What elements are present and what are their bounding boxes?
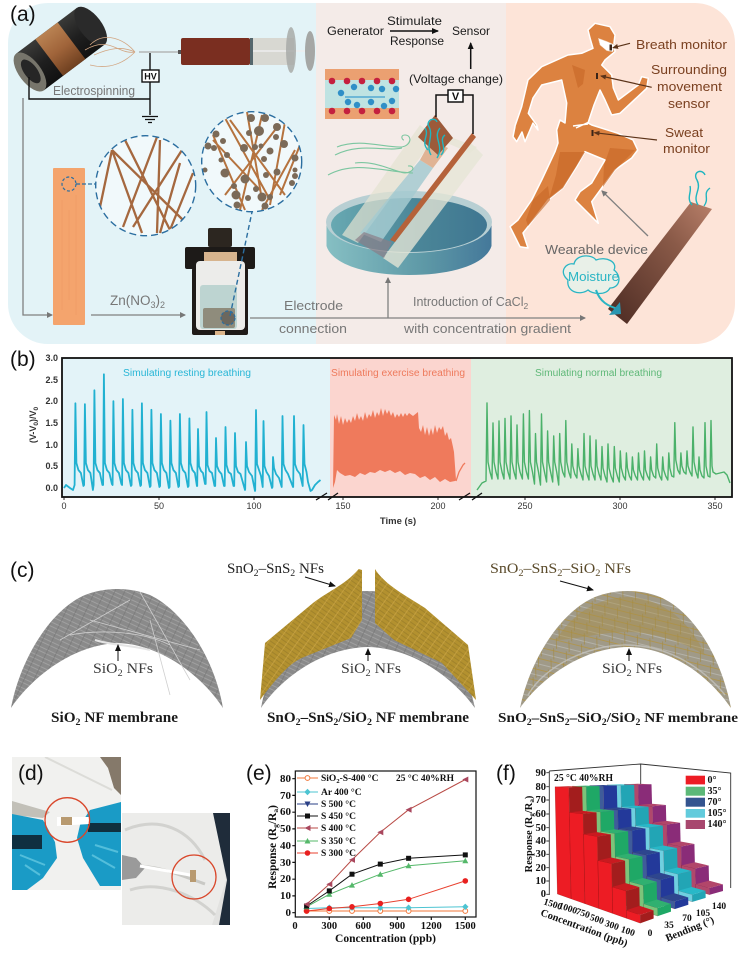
legend: -S-400 °C xyxy=(340,773,379,784)
photo: gloved hands stretching device xyxy=(12,757,121,890)
label: SnO2-SnS2-SiO2 NFs: –SiO xyxy=(561,561,595,577)
y tick labels: 80 xyxy=(536,782,546,793)
label: SnO2-SnS2 NFs xyxy=(227,561,335,586)
chart titles: Simulating exercise breathing xyxy=(331,368,465,379)
x tick labels xyxy=(292,921,476,932)
legend: 70° xyxy=(708,797,722,808)
caption: composite membrane: SnO xyxy=(498,711,524,726)
label: SiO2 NFs 3 xyxy=(602,649,662,679)
bending tick labels: 105 xyxy=(696,909,710,919)
concentration tick labels xyxy=(542,897,636,939)
callout: Breath monitor: Breath monitor xyxy=(636,37,728,52)
caption: SnO2-SnS2/SiO2 NF membrane: 2 xyxy=(367,718,372,728)
x axis ticks: 300 xyxy=(612,501,628,511)
panel (a): fabrication and application schematic xyxy=(7,1,735,344)
legend: S 500 °C xyxy=(321,799,356,810)
photo: device on clothing xyxy=(122,813,230,925)
panel (c): nanofiber membrane illustrations xyxy=(10,559,738,728)
panel (d): device photos xyxy=(12,757,230,925)
x axis ticks: 150 xyxy=(335,501,351,511)
label (f): (f) xyxy=(496,762,516,785)
concentration tick labels: 750 xyxy=(574,907,591,921)
caption: SiO2 NF membrane: SiO xyxy=(51,710,74,726)
legend: 0° xyxy=(708,775,716,786)
caption: composite membrane: 2 xyxy=(527,717,532,727)
x axis ticks: 0 xyxy=(61,501,67,511)
legend: Ar 400 °C xyxy=(321,787,362,798)
y axis label: 0 xyxy=(33,422,40,426)
caption: SiO2 NF membrane: 2 xyxy=(76,718,81,728)
y tick labels: 40 xyxy=(280,840,292,852)
x tick labels: 0 xyxy=(292,921,298,932)
y tick labels: 70 xyxy=(536,795,546,806)
icon: collector drum xyxy=(7,1,135,97)
y tick labels: 20 xyxy=(536,863,546,874)
x axis ticks: 100 xyxy=(246,501,262,511)
y axis label: Response (R xyxy=(524,817,535,872)
callout: Surrounding movement sensor: sensor xyxy=(668,96,711,111)
callout: Moisture cloud xyxy=(563,256,621,315)
diagram: generator-sensor relation: Stimulate xyxy=(387,14,442,28)
x tick labels: 1200 xyxy=(421,921,442,932)
magnified circle: fibers with ZnO particles xyxy=(202,112,302,212)
y tick labels: 30 xyxy=(536,849,546,860)
label: SiO2 NFs 2: SiO xyxy=(341,661,364,677)
runner figure xyxy=(510,23,648,248)
label: SnO2-SnS2 NFs: SnO xyxy=(227,561,253,577)
x tick labels: 600 xyxy=(355,921,371,932)
y axis label: ) xyxy=(524,795,535,799)
x axis label: Time (s) xyxy=(380,516,416,527)
diagram: generator-sensor relation: (Voltage change) xyxy=(409,72,503,86)
diagram: generator-sensor relation: Response xyxy=(390,34,444,48)
x tick labels: 300 xyxy=(321,921,337,932)
y axis ticks: 1.5 xyxy=(45,418,58,428)
arch: SnO2-SnS2 on SiO2 xyxy=(260,569,476,708)
label: SnO2-SnS2 NFs: NFs xyxy=(295,561,324,577)
x axis ticks: 50 xyxy=(154,501,164,511)
label: SiO2 NFs 1 xyxy=(93,645,153,679)
caption: SnO2-SnS2/SiO2 NF membrane: –SnS xyxy=(300,710,333,726)
legend: S 450 °C xyxy=(321,811,356,822)
text: Zn(NO3)2 reagent: 3 xyxy=(150,300,156,310)
x axis label: Concentration (ppb) xyxy=(335,933,436,945)
label: SnO2-SnS2 NFs: 2 xyxy=(254,569,259,579)
text: Wearable device: Wearable device xyxy=(545,242,648,257)
arch: SiO2 membrane xyxy=(11,589,223,708)
y axis label: a xyxy=(271,809,280,813)
concentration tick labels: 100 xyxy=(619,925,636,939)
concentration tick labels: 500 xyxy=(588,913,605,927)
y tick labels: 60 xyxy=(280,806,292,818)
caption: composite membrane: NF membrane xyxy=(640,711,738,726)
callout: Moisture cloud: Moisture xyxy=(568,270,619,284)
chart frame xyxy=(62,358,732,497)
moisture swirls at electrode xyxy=(425,119,445,158)
legend: 2 xyxy=(336,778,340,785)
legend: 25 °C 40%RH xyxy=(396,773,455,784)
legend xyxy=(297,773,455,859)
trace: resting breathing xyxy=(64,374,320,491)
arch: SnO2-SnS2-SiO2 composite xyxy=(520,591,731,708)
label: SnO2-SnS2 NFs: 2 xyxy=(290,569,295,579)
y tick labels: 90 xyxy=(536,768,546,779)
y axis label: Response (R xyxy=(267,828,279,889)
legend: 35° xyxy=(708,786,722,797)
airflow lines xyxy=(328,135,413,175)
label: SnO2-SnS2-SiO2 NFs: SnO xyxy=(490,561,516,577)
label: SiO2 NFs 1: SiO xyxy=(93,661,116,677)
label: SnO2-SnS2-SiO2 NFs xyxy=(490,561,631,590)
y axis ticks: 0.0 xyxy=(45,483,58,493)
y tick labels: 40 xyxy=(536,836,546,847)
text: Electrode connection: Electrode xyxy=(284,299,343,313)
legend xyxy=(686,775,726,830)
caption: SnO2-SnS2/SiO2 NF membrane: 2 xyxy=(296,718,301,728)
chart frame xyxy=(546,764,731,895)
y tick labels: 20 xyxy=(280,873,292,885)
annotation: conditions: 25 °C 40%RH xyxy=(554,773,613,784)
axis break marks xyxy=(64,493,715,500)
callout: Surrounding movement sensor: movement xyxy=(657,79,722,94)
label: SiO2 NFs 1: 2 xyxy=(118,669,123,679)
icon: syringe xyxy=(139,27,315,73)
callout: Surrounding movement sensor xyxy=(596,62,727,111)
y tick labels: 80 xyxy=(280,773,292,785)
text: Zn(NO3)2 reagent: 2 xyxy=(160,300,165,310)
legend: S 300 °C xyxy=(321,848,356,859)
x axis ticks xyxy=(61,501,723,511)
trace: normal breathing xyxy=(477,403,730,490)
panel (e): response vs concentration line chart xyxy=(246,762,476,945)
x axis ticks: 350 xyxy=(707,501,723,511)
legend: SiO xyxy=(321,774,336,784)
callout: Surrounding movement sensor: Surrounding xyxy=(651,62,727,77)
caption: SnO2-SnS2/SiO2 NF membrane: 2 xyxy=(333,718,339,728)
arrow: device to body xyxy=(602,191,648,236)
panel (f): 3D bar chart of bending response xyxy=(496,762,731,950)
icon: autoclave jar xyxy=(185,212,255,335)
y axis ticks: 0.5 xyxy=(45,461,58,471)
magnified circle: bare fibers xyxy=(96,136,196,236)
concentration tick labels: 1500 xyxy=(542,897,563,913)
bending tick labels: 35 xyxy=(664,921,674,931)
label: SiO2 NFs 3: NFs xyxy=(632,661,662,677)
concentration tick labels: 1000 xyxy=(557,901,578,917)
y tick labels: 50 xyxy=(536,823,546,834)
arrow: main process line xyxy=(250,317,585,319)
caption: SnO2-SnS2/SiO2 NF membrane: NF membrane xyxy=(372,710,470,726)
bending tick labels: 140 xyxy=(712,902,726,912)
chart titles: Simulating normal breathing xyxy=(535,368,662,379)
bending tick labels: 70 xyxy=(682,914,692,924)
high voltage circuit: HV xyxy=(144,72,157,82)
voltmeter and wires xyxy=(436,90,473,134)
callout: Sweat monitor: monitor xyxy=(663,141,711,156)
y axis ticks: 1.0 xyxy=(45,440,58,450)
text: CaCl2 gradient xyxy=(403,295,572,336)
callout: Sweat monitor xyxy=(592,125,711,156)
text: Zn(NO3)2 reagent: ) xyxy=(156,293,160,308)
chart backgrounds xyxy=(62,358,732,497)
caption: composite membrane: –SnS xyxy=(531,711,565,726)
y axis label: g xyxy=(528,813,536,817)
text: CaCl2 gradient: 2 xyxy=(523,301,528,311)
x axis ticks: 200 xyxy=(430,501,446,511)
label: SiO2 NFs 2 xyxy=(341,649,401,679)
y tick labels: 0 xyxy=(541,889,546,900)
label: SiO2 NFs 3: 2 xyxy=(627,669,632,679)
text: CaCl2 gradient: Introduction of CaCl xyxy=(413,295,523,309)
diagram: generator-sensor relation: Generator xyxy=(327,24,384,38)
y tick labels: 0 xyxy=(286,907,292,919)
3D bars xyxy=(555,784,723,923)
x tick labels: 1500 xyxy=(455,921,476,932)
label: SiO2 NFs 1: NFs xyxy=(123,661,153,677)
caption: SnO2-SnS2/SiO2 NF membrane: SnO xyxy=(267,710,294,726)
y tick labels xyxy=(280,773,292,919)
label: SnO2-SnS2-SiO2 NFs: 2 xyxy=(518,569,524,579)
arrow: up to generator xyxy=(387,278,389,318)
concentration tick labels: 300 xyxy=(603,919,620,933)
label: SnO2-SnS2-SiO2 NFs: –SnS xyxy=(522,561,557,577)
y tick labels: 30 xyxy=(280,857,292,869)
legend: S 400 °C xyxy=(321,823,356,834)
arrow: to autoclave xyxy=(91,314,185,316)
y axis label: a xyxy=(528,799,536,803)
y axis ticks: 3.0 xyxy=(45,353,58,363)
y axis label: /R xyxy=(524,802,535,814)
y axis label: 0 xyxy=(33,406,40,410)
label (b): (b) xyxy=(10,348,36,371)
y axis label: )/V xyxy=(28,410,38,422)
y axis ticks: 2.0 xyxy=(45,396,58,406)
bending tick labels xyxy=(648,902,726,939)
y axis label: g xyxy=(271,824,280,828)
caption: composite membrane: 2 xyxy=(636,717,641,727)
x axis ticks: 250 xyxy=(517,501,533,511)
trace: exercise breathing xyxy=(333,408,465,488)
arrow: membrane transfer xyxy=(23,98,52,315)
high voltage circuit xyxy=(29,53,159,122)
label: SiO2 NFs 3: SiO xyxy=(602,661,625,677)
y tick labels: 70 xyxy=(280,790,292,802)
wearable device strip xyxy=(608,171,712,324)
series lines with markers xyxy=(307,780,465,911)
caption: SnO2-SnS2/SiO2 NF membrane: /SiO xyxy=(337,710,367,726)
caption: composite membrane: 2 xyxy=(602,717,607,727)
label (a): (a) xyxy=(10,3,36,26)
label: SnO2-SnS2-SiO2 NFs: 2 xyxy=(557,569,563,579)
label (d): (d) xyxy=(18,762,44,785)
legend: 105° xyxy=(708,808,726,819)
nanofiber membrane strip xyxy=(53,168,97,325)
x tick labels: 900 xyxy=(389,921,405,932)
diagram: generator-sensor relation xyxy=(327,14,503,86)
y axis ticks: 2.5 xyxy=(45,375,58,385)
chart titles: Simulating resting breathing xyxy=(123,368,251,379)
y tick labels: 50 xyxy=(280,823,292,835)
text: Electrode connection: connection xyxy=(279,322,347,336)
caption: SiO2 NF membrane: NF membrane xyxy=(81,710,179,726)
plot axes xyxy=(292,771,476,920)
label: SiO2 NFs 2: 2 xyxy=(366,669,371,679)
chart titles xyxy=(123,368,662,379)
text: Electrospinning: Electrospinning xyxy=(53,84,135,98)
callout: Sweat monitor: Sweat xyxy=(665,125,703,140)
diagram: generator-sensor relation: Sensor xyxy=(452,24,490,38)
text: Zn(NO3)2 reagent: Zn(NO xyxy=(110,293,150,308)
y tick labels xyxy=(536,768,546,900)
y axis label: (V-V xyxy=(28,426,38,443)
voltmeter and wires: V xyxy=(452,91,460,103)
y axis ticks xyxy=(45,353,58,493)
legend: S 350 °C xyxy=(321,836,356,847)
y axis label: ) xyxy=(267,805,279,809)
section backgrounds xyxy=(8,3,735,344)
bending axis label: Bending (°) xyxy=(664,915,716,944)
caption: composite membrane: /SiO xyxy=(606,711,636,726)
label: SnO2-SnS2-SiO2 NFs: NFs xyxy=(600,561,631,577)
icon: water dish with strips xyxy=(326,115,492,275)
caption: composite membrane: –SiO xyxy=(569,711,602,726)
panel (b): breathing response chart xyxy=(10,348,732,527)
text: Electrode connection xyxy=(279,299,347,336)
y axis label: /R xyxy=(267,812,279,825)
inset: ion migration channel xyxy=(325,69,399,119)
y tick labels: 60 xyxy=(536,809,546,820)
label (e): (e) xyxy=(246,762,272,785)
y tick labels: 10 xyxy=(536,876,546,887)
bending tick labels: 0 xyxy=(648,929,653,939)
concentration axis label: Concentration (ppb) xyxy=(539,908,629,950)
label: SnO2-SnS2-SiO2 NFs: 2 xyxy=(595,569,601,579)
text: CaCl2 gradient: with concentration gradient xyxy=(403,322,572,336)
y tick labels: 10 xyxy=(280,890,292,902)
caption: composite membrane: 2 xyxy=(565,717,570,727)
label (c): (c) xyxy=(10,559,34,582)
label: SnO2-SnS2 NFs: –SnS xyxy=(258,561,290,577)
label: SiO2 NFs 2: NFs xyxy=(371,661,401,677)
legend: 140° xyxy=(708,819,726,830)
